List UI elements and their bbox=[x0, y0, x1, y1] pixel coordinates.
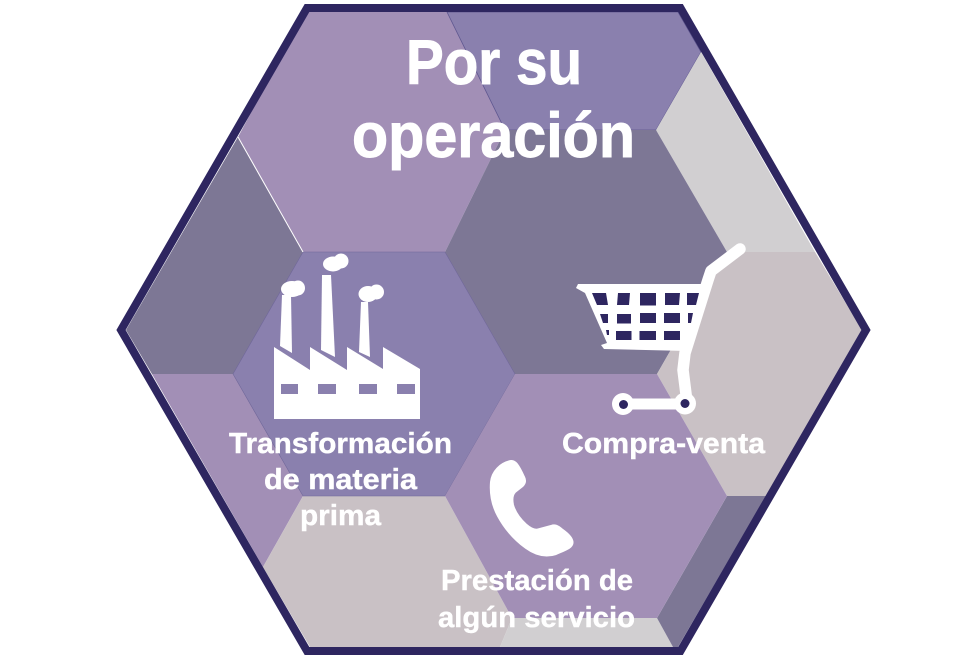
panel: bottom grey cell bbox=[500, 618, 673, 647]
title bbox=[352, 28, 635, 171]
label: prestación de algún servicio bbox=[438, 565, 635, 634]
panel: right grey cell bbox=[656, 52, 815, 252]
panel: bottom taupe cell bbox=[263, 496, 512, 647]
icon: factory bbox=[274, 254, 420, 419]
panel: factory cell bbox=[233, 252, 515, 496]
panel: right taupe cell bbox=[657, 252, 862, 496]
label: transformación de materia prima bbox=[229, 428, 452, 532]
white edge between top-left and left cells bbox=[238, 137, 303, 252]
panel: lower-right dark cell bbox=[657, 496, 766, 647]
title: Por su bbox=[406, 28, 582, 98]
label: transformación de materia prima: de materia bbox=[264, 464, 418, 496]
title: operación bbox=[352, 101, 635, 171]
label: transformación de materia prima: Transformación bbox=[229, 428, 452, 460]
label: transformación de materia prima: prima bbox=[300, 500, 382, 532]
panel: lower-left purple cell bbox=[152, 374, 303, 567]
label: prestación de algún servicio: Prestación de bbox=[441, 565, 633, 597]
icon: telephone bbox=[491, 461, 573, 556]
panel: centre dark cell bbox=[445, 130, 727, 374]
hexagon outline bbox=[121, 8, 866, 651]
panel: left dark cell bbox=[126, 137, 303, 374]
label: compra-venta: Compra-venta bbox=[562, 428, 766, 460]
panel: top-left cell bbox=[238, 12, 505, 252]
panel: phone cell bbox=[445, 374, 727, 618]
icon: shopping cart bbox=[576, 249, 740, 415]
panel: top blue cell bbox=[447, 12, 701, 130]
label: prestación de algún servicio: algún servicio bbox=[438, 602, 635, 634]
